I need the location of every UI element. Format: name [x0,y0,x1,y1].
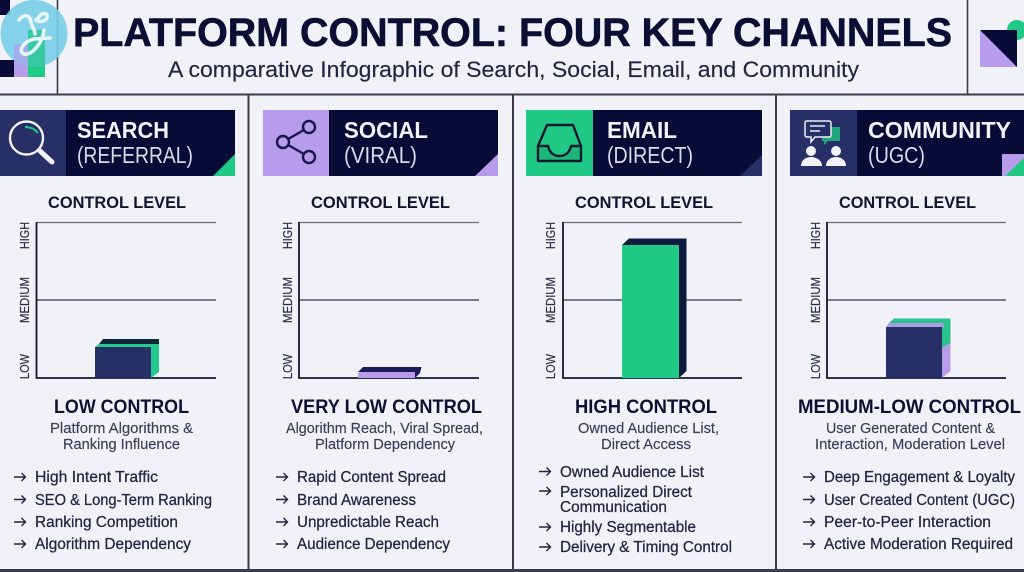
control rating and description: User Generated Content & [826,421,995,437]
bullet list: Brand Awareness [297,492,416,509]
control rating and description: Platform Algorithms & [50,421,193,437]
control rating and description: Algorithm Reach, Viral Spread, [286,421,483,437]
bullet list [276,469,450,553]
bar chart: email high control: MEDIUM [544,277,558,323]
panel: search [0,110,235,553]
bar chart: social very low control: LOW [281,354,295,379]
email banner: (DIRECT) [607,142,693,168]
bullet list: SEO & Long-Term Ranking [35,492,212,509]
bar chart: email high control [544,222,742,379]
bullet list: Rapid Content Spread [297,469,446,486]
bullet list: Communication [560,499,667,516]
bar chart: email high control: HIGH [544,222,558,249]
community banner: (UGC) [868,142,925,168]
social banner: (VIRAL) [344,142,417,168]
email banner: EMAIL [607,117,677,143]
control rating and description: LOW CONTROL [54,396,189,418]
bullet list: Owned Audience List [560,464,705,481]
control rating and description: Owned Audience List, [578,421,719,437]
bullet list: Personalized Direct [560,484,693,501]
bullet list: Peer-to-Peer Interaction [824,514,991,531]
control rating and description: VERY LOW CONTROL [291,396,482,418]
heading: control level: CONTROL LEVEL [839,193,976,212]
control rating and description: MEDIUM-LOW CONTROL [798,396,1021,418]
icon: magnifying glass [10,122,52,162]
control rating and description: Direct Access [601,437,691,453]
bar chart: email high control: LOW [544,354,558,379]
bullet list [539,464,732,556]
control rating and description [798,396,1021,453]
bar chart: community medium-low control [809,222,1006,379]
community banner: COMMUNITY [868,117,1011,143]
bar chart: community medium-low control: MEDIUM [809,277,823,323]
bar chart: search low control: MEDIUM [18,277,32,323]
bar chart: social very low control: HIGH [281,222,295,249]
logo: top-right geometric mark [980,20,1024,67]
heading: control level: CONTROL LEVEL [48,193,186,212]
bullet list: Unpredictable Reach [297,514,439,531]
bullet list: Active Moderation Required [824,536,1013,553]
bar chart: community medium-low control: HIGH [809,222,823,249]
email banner [526,110,762,176]
icon: inbox tray [538,125,581,161]
subtitle: A comparative Infographic of Search, Social, Email, and Community [168,57,859,82]
bar chart: community medium-low control: LOW [809,354,823,379]
control rating and description [50,396,193,453]
bar chart: search low control [18,222,216,379]
search banner [0,110,235,176]
title: PLATFORM CONTROL: FOUR KEY CHANNELS [73,11,952,55]
bullet list: Delivery & Timing Control [560,539,732,556]
bullet list: User Created Content (UGC) [824,492,1015,509]
logo: top-left brand mark with teal badge [0,0,68,77]
bullet list [803,469,1015,553]
social banner [263,110,498,176]
social banner: SOCIAL [344,117,428,143]
bullet list: Algorithm Dependency [35,536,191,553]
panel: social [263,110,498,553]
heading: control level: CONTROL LEVEL [311,193,450,212]
icon: share network [277,121,315,163]
bullet list: Deep Engagement & Loyalty [824,469,1015,486]
bullet list: Highly Segmentable [560,519,696,536]
control rating and description [575,396,719,453]
community banner [790,110,1024,176]
control rating and description: Ranking Influence [63,437,180,453]
bullet list: Audience Dependency [297,536,450,553]
control rating and description: Platform Dependency [315,437,456,453]
control rating and description [286,396,483,453]
bullet list [14,469,212,553]
bar chart: social very low control [281,222,479,379]
bar chart: search low control: HIGH [18,222,32,249]
icon: people with speech bubbles [801,121,846,166]
bullet list: High Intent Traffic [35,469,158,486]
control rating and description: HIGH CONTROL [575,396,717,418]
search banner: (REFERRAL) [77,142,193,168]
search banner: SEARCH [77,117,169,143]
bar chart: social very low control: MEDIUM [281,277,295,323]
bar chart: search low control: LOW [18,354,32,379]
heading: control level: CONTROL LEVEL [575,193,713,212]
bullet list: Ranking Competition [35,514,178,531]
panel: email [526,110,762,556]
panel: community [790,110,1024,553]
control rating and description: Interaction, Moderation Level [815,437,1005,453]
